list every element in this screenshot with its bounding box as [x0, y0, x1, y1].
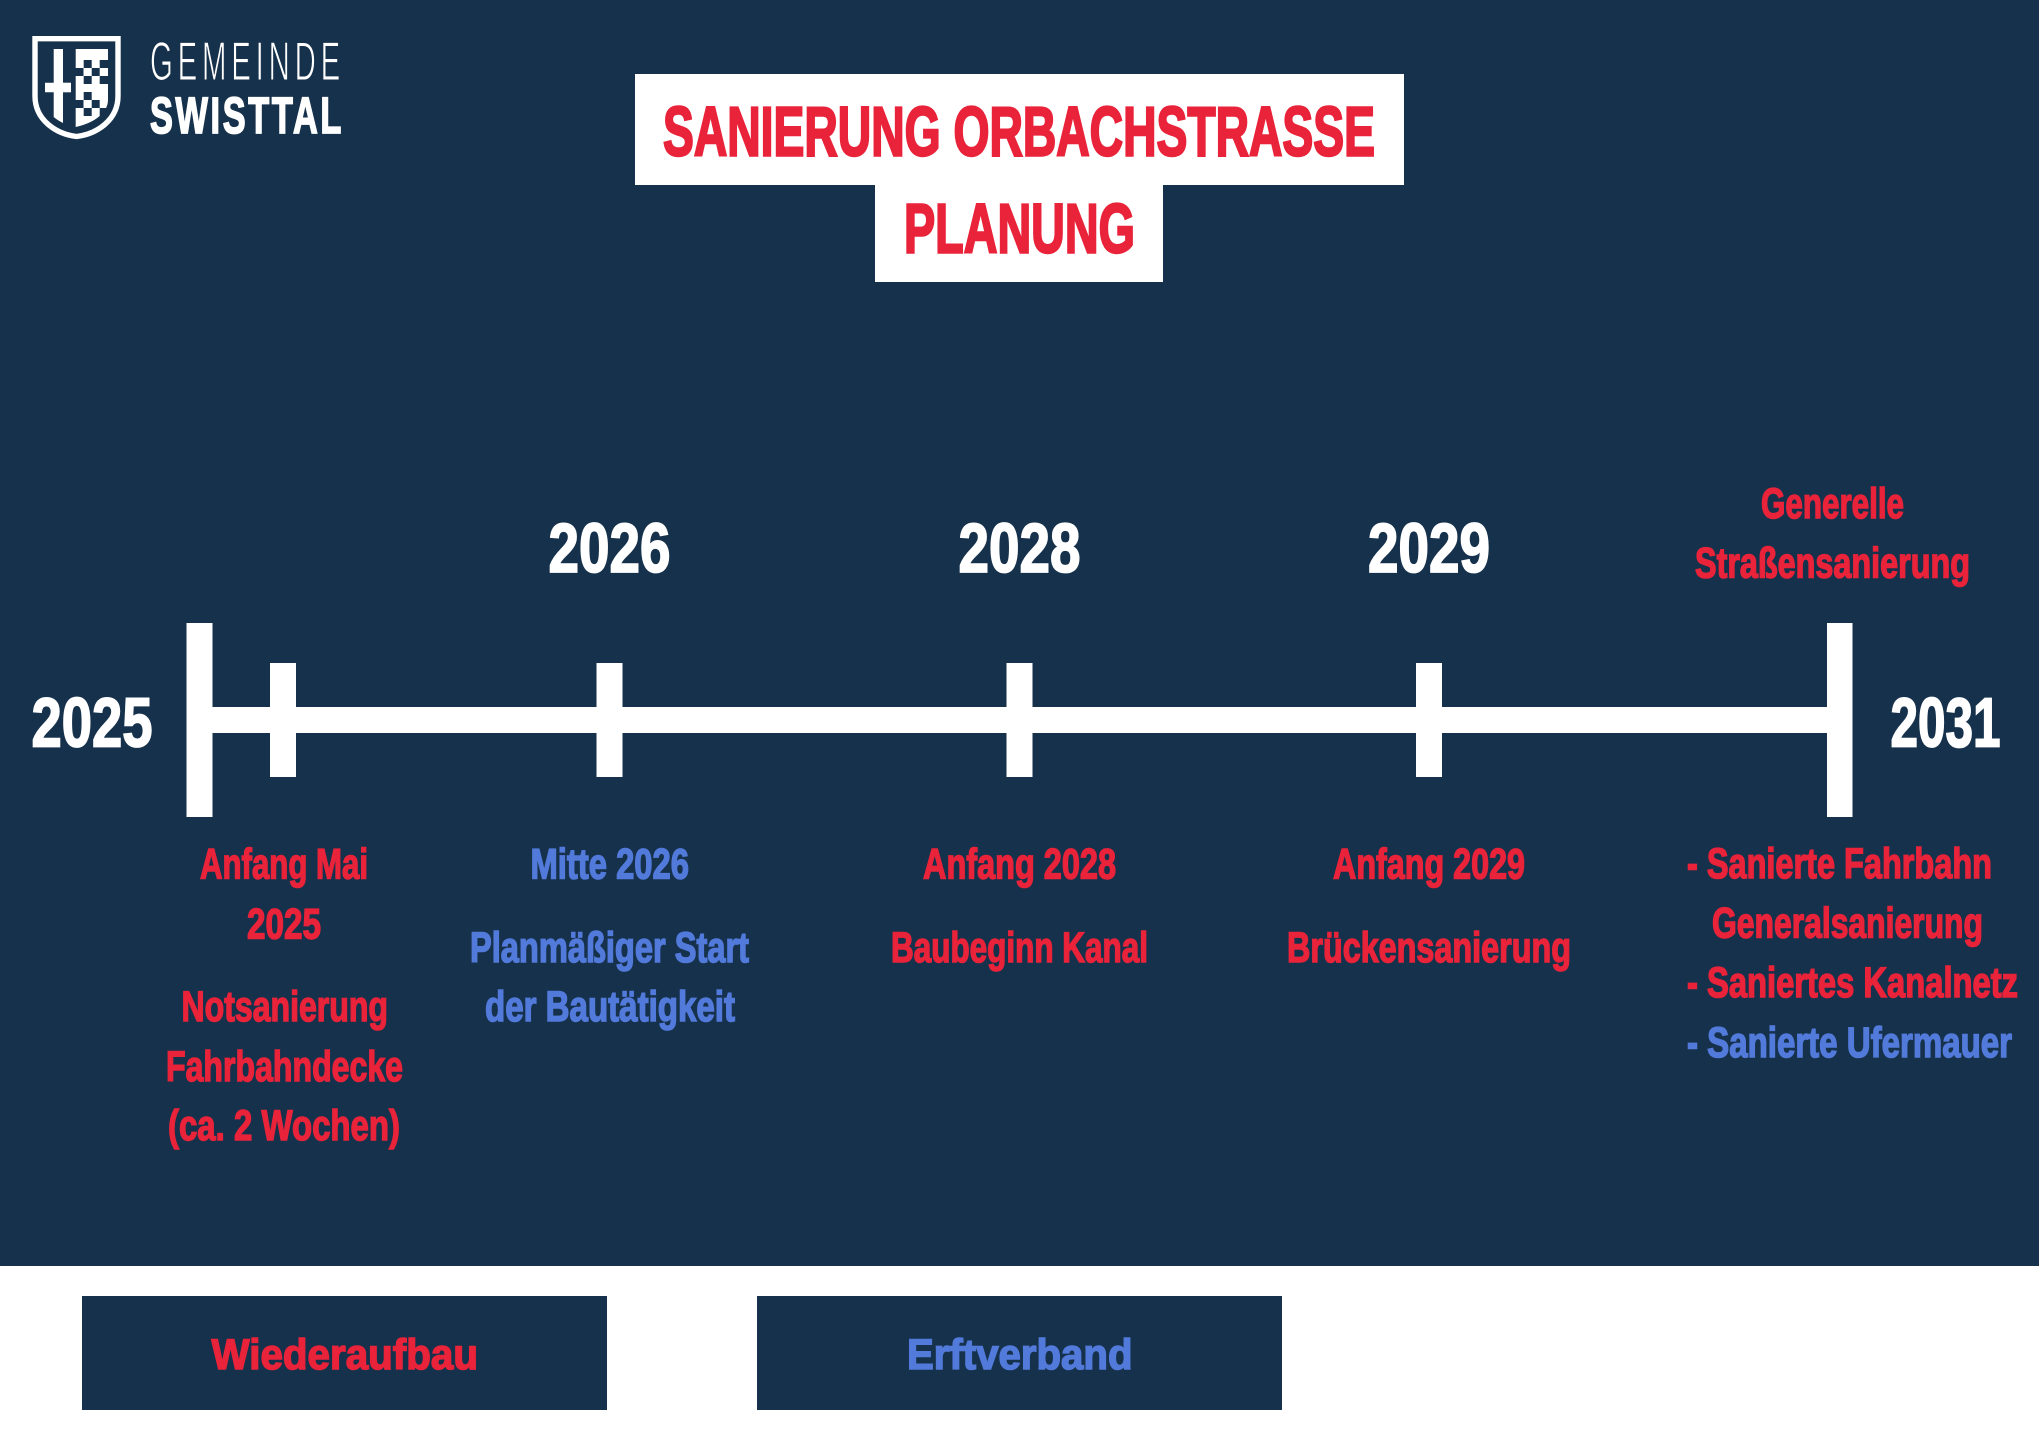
milestone: Anfang 2029: Brückensanierung [1287, 924, 1571, 972]
timeline axis [186, 623, 1852, 817]
title box line 2 [875, 184, 1163, 282]
milestone: Anfang 2028: Anfang 2028 [923, 840, 1116, 888]
legend: Erftverband: Erftverband [907, 1331, 1132, 1379]
milestone: Generelle Straßensanierung: Generelle [1761, 480, 1904, 528]
title box line 1 [635, 74, 1404, 185]
milestone: Mitte 2026 [470, 840, 749, 1031]
milestone: Anfang Mai 2025: 2025 [247, 900, 321, 948]
year 2025: 2025 [32, 684, 152, 762]
legend: Wiederaufbau [82, 1296, 607, 1410]
milestone: Mitte 2026: Planmäßiger Start [470, 924, 749, 972]
milestone: Anfang 2029 [1287, 840, 1571, 972]
milestone: Mitte 2026: Mitte 2026 [530, 840, 689, 888]
year 2026: 2026 [548, 509, 670, 587]
milestone: Anfang 2028: Baubeginn Kanal [891, 924, 1148, 972]
milestone: Anfang Mai 2025: Fahrbahndecke [166, 1043, 403, 1091]
logo: Gemeinde Swisttal [35, 30, 345, 144]
legend: Erftverband [757, 1296, 1282, 1410]
icon: shield crest [35, 39, 118, 137]
legend: Wiederaufbau: Wiederaufbau [212, 1331, 478, 1379]
milestone: Anfang 2029: Anfang 2029 [1333, 840, 1525, 888]
title text line 2: PLANUNG [904, 190, 1135, 268]
logo text: Swisttal: SWISTTAL [150, 87, 344, 144]
title text line 1: SANIERUNG ORBACHSTRASSE [663, 92, 1375, 170]
year labels [32, 509, 2000, 762]
milestone: Anfang Mai 2025: Notsanierung [182, 983, 388, 1031]
year 2029: 2029 [1368, 509, 1490, 587]
milestone: Mitte 2026: der Bautätigkeit [485, 983, 735, 1031]
milestone: Anfang 2028 [891, 840, 1148, 972]
year 2028: 2028 [958, 509, 1080, 587]
milestone: 2031 results [1687, 840, 2018, 1067]
milestone: Anfang Mai 2025: (ca. 2 Wochen) [168, 1102, 400, 1150]
logo text: Gemeinde: GEMEINDE [150, 30, 345, 92]
title [635, 74, 1404, 282]
milestone: Generelle Straßensanierung [1695, 480, 1970, 588]
milestone: Anfang Mai 2025: Anfang Mai [200, 840, 368, 888]
milestone: Anfang Mai 2025 [166, 840, 403, 1150]
